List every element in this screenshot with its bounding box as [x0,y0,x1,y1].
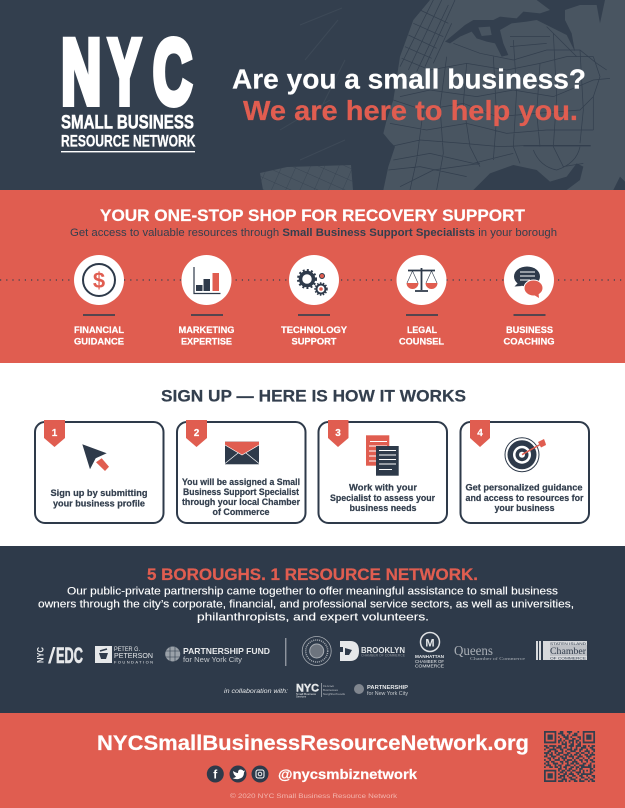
card: step 3: business needs [350,503,416,513]
section subtitle: Get access to valuable resources through Small Business Support Specialists in your borough [70,227,557,239]
QR code [544,732,595,781]
logo: Partnership for New York City: PARTNERSHIP [367,685,408,691]
logo: NYC Small Business Resource Network: Y [108,22,140,124]
logo: Staten Island Chamber of Commerce: OF COMMERCE [550,656,587,660]
card: step 4 [460,420,589,523]
card: step 2: 2 [194,428,200,439]
logo: NYC EDC [36,643,83,668]
social icons: f [213,768,218,782]
logo: NYC Small Business Services: Neighborhoods [323,692,346,696]
section heading: SIGN UP — HERE IS HOW IT WORKS [161,386,466,406]
headline [232,64,586,126]
label: legal counsel: LEGAL [407,325,437,335]
panel: how it works [0,363,625,546]
card: step 3: Specialist to assess your [330,493,435,503]
card: step 2: You will be assigned a Small [182,477,300,487]
logo: Partnership for New York City [354,684,408,697]
label: business coaching [504,314,554,346]
social handle: @nycsmbiznetwork [278,766,417,782]
card: step 1 [35,420,164,523]
headline: Are you a small business? [232,64,586,94]
logo: NYC Small Business Resource Network [61,22,196,152]
logo: Peter G. Peterson Foundation: PETERSON [114,651,153,660]
section heading: YOUR ONE-STOP SHOP FOR RECOVERY SUPPORT [100,206,526,225]
label: technology support: TECHNOLOGY [281,325,347,335]
label: financial guidance: FINANCIAL [74,325,124,335]
logo: Manhattan Chamber of Commerce: MANHATTAN [415,654,445,660]
logo: Partnership Fund for New York City: PARTNERSHIP FUND [183,646,270,656]
headline: We are here to help you. [243,95,578,126]
logo: Partnership Fund for New York City [165,646,270,664]
logo: NYC Small Business Services: Grow [323,684,335,688]
logo: city seal [302,636,331,666]
logo: Brooklyn Chamber of Commerce: BROOKLYN [361,646,405,655]
logo: Peter G. Peterson Foundation: FOUNDATION [114,660,153,664]
logo: Staten Island Chamber of Commerce [536,641,587,660]
card: step 4: and access to resources for [466,493,584,503]
logo: NYC EDC: NYC [36,647,46,663]
card: step 4: 4 [477,428,483,439]
label: legal counsel [399,314,444,346]
card: step 3: 3 [335,428,341,439]
description: owners through the city’s corporate, financial, and professional service sectors, as well as universities, [38,598,574,610]
label: business coaching: COACHING [504,336,554,346]
logo: Manhattan Chamber of Commerce: CHAMBER OF [415,659,444,665]
icon: business coaching [504,255,554,305]
social icons [207,766,268,782]
logo: Staten Island Chamber of Commerce: STATEN ISLAND [550,642,587,646]
logo: NYC Small Business Services: NYC [296,682,319,694]
description [38,586,574,624]
logo: Partnership for New York City: for New York City [367,691,408,697]
description: Our public-private partnership came together to offer meaningful assistance to small business [67,586,559,598]
card: step 1: 1 [52,428,58,439]
map of New York City [260,0,625,190]
section heading: 5 BOROUGHS. 1 RESOURCE NETWORK. [147,566,478,584]
label: marketing expertise [178,314,234,346]
card: step 2: Business Support Specialist [183,487,299,497]
logo: NYC Small Business Resource Network: SMALL BUSINESS [61,112,194,133]
label: financial guidance: GUIDANCE [74,336,124,346]
icon: legal counsel [396,255,446,305]
logo: NYC Small Business Resource Network: RESOURCE NETWORK [61,132,196,151]
description: philanthropists, and expert volunteers. [197,612,429,624]
card: step 2: of Commerce [212,507,270,517]
panel: header [0,0,625,190]
logo: Queens Chamber of Commerce: Chamber of Commerce [470,656,525,661]
logo: Manhattan Chamber of Commerce [415,632,445,670]
copyright: © 2020 NYC Small Business Resource Network [230,792,398,800]
logo: NYC Small Business Services [296,682,346,698]
label: business coaching: BUSINESS [506,325,553,335]
panel: boroughs and partners [0,546,625,713]
card: step 1: your business profile [53,498,145,508]
icon: technology support [289,255,339,305]
logo: NYC Small Business Services: Businesses [323,688,338,692]
card: step 4: your business [494,503,554,513]
label: legal counsel: COUNSEL [399,336,444,346]
logo: Brooklyn Chamber of Commerce: CHAMBER OF COMMERCE [361,654,406,658]
label: marketing expertise: MARKETING [178,325,234,335]
label: financial guidance [74,314,124,346]
card: step 3 [318,420,447,523]
panel: footer [0,713,625,808]
card: step 2: through your local Chamber [182,497,300,507]
icon: financial guidance [74,255,124,305]
card: step 4: Get personalized guidance [466,482,582,492]
card: step 1: Sign up by submitting [50,488,148,498]
card: step 2 [177,420,306,523]
logo: NYC Small Business Services: Services [296,694,307,698]
logo: Manhattan Chamber of Commerce: COMMERCE [415,664,444,670]
website url: NYCSmallBusinessResourceNetwork.org [97,731,529,755]
logo: NYC Small Business Resource Network: N [61,22,101,124]
logo: NYC Small Business Services: Small Business [296,692,317,696]
logo: Queens Chamber of Commerce [454,644,525,661]
panel: one-stop shop [0,190,625,363]
label: technology support [281,314,347,346]
icon: marketing expertise [182,255,232,305]
logo: Brooklyn Chamber of Commerce [340,641,406,661]
logo: NYC EDC: EDC [56,643,83,668]
logo: Peter G. Peterson Foundation [95,646,153,664]
logo: Partnership Fund for New York City: for New York City [183,657,243,664]
logo: Manhattan Chamber of Commerce: M [425,638,435,650]
logo: Peter G. Peterson Foundation: PETER G. [114,646,140,653]
card: step 3: Work with your [349,482,418,492]
label: technology support: SUPPORT [292,336,337,346]
logo: Queens Chamber of Commerce: Queens [454,644,493,659]
logo: Staten Island Chamber of Commerce: Chamber [550,647,587,657]
label: marketing expertise: EXPERTISE [181,336,232,346]
icon: financial guidance: $ [93,268,105,293]
collaboration label: in collaboration with: [224,688,288,695]
logo: NYC Small Business Resource Network: C [153,22,192,124]
